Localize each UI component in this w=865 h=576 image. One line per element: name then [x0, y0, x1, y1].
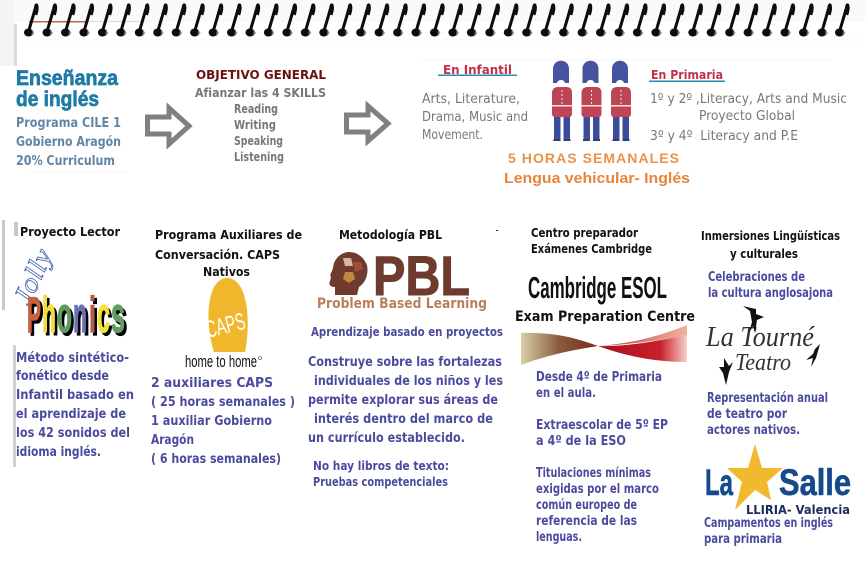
arrow: title to objective	[148, 108, 189, 144]
panel: Metodología PBL: No hay libros de texto:	[313, 459, 449, 473]
panel: Programa Auxiliares: 2 auxiliares CAPS	[151, 376, 273, 391]
panel: Metodología PBL: Problem Based Learning	[317, 296, 487, 312]
title block: Enseñanza de inglés: Gobierno Aragón	[16, 135, 121, 150]
panel: Centro preparador Cambridge: Desde 4º de Primaria	[536, 370, 662, 385]
panel: En Primaria: Proyecto Global	[699, 108, 795, 124]
panel: Proyecto Lector: el aprendizaje de	[16, 407, 126, 422]
logo: Cambridge ESOL: Exam Preparation Centre	[515, 309, 695, 325]
panel: Metodología PBL: individuales de los niños y les	[314, 374, 503, 389]
panel: Proyecto Lector: Proyecto Lector	[20, 224, 121, 239]
logo: Jolly Phonics: c	[97, 287, 110, 343]
panel: Metodología PBL: Metodología PBL	[339, 227, 442, 242]
objective block: Afianzar las 4 SKILLS	[195, 86, 326, 100]
panel: Programa Auxiliares: Aragón	[151, 433, 194, 448]
logo: La Salle: Salle	[779, 462, 851, 503]
panel: Proyecto Lector: los 42 sonidos del	[16, 426, 130, 441]
panel: Centro preparador Cambridge: en el aula.	[536, 386, 596, 401]
logo: Jolly Phonics: s	[111, 287, 125, 343]
logo: Jolly Phonics: n	[76, 290, 90, 346]
objective block: Speaking	[234, 134, 283, 148]
logo: Jolly Phonics: o	[60, 290, 74, 346]
panel: Inmersiones Lingüísticas: para primaria	[704, 532, 782, 547]
logo: CAPS home to home: CAPS	[203, 308, 248, 344]
panel: Inmersiones Lingüísticas	[701, 228, 851, 547]
panel: En Infantil: Drama, Music and	[422, 109, 528, 125]
panel: Proyecto Lector: Método sintético-	[16, 351, 129, 366]
callout: weekly hours: 5 HORAS SEMANALES	[508, 150, 679, 166]
panel: En Primaria: 1º y 2º ,Literacy, Arts and Music	[650, 91, 847, 107]
arrow: objective to stages	[346, 106, 388, 141]
panel: En Infantil: Movement.	[422, 127, 483, 143]
panel: En Primaria	[649, 67, 847, 144]
objective block: Reading	[234, 102, 278, 116]
logo: Jolly Phonics: i	[92, 290, 98, 346]
panel: Programa Auxiliares: Nativos	[203, 264, 250, 279]
panel: Inmersiones Lingüísticas: de teatro por	[707, 407, 787, 422]
logo: La Tourné Teatro: Teatro	[735, 350, 791, 376]
panel: Programa Auxiliares: 1 auxiliar Gobierno	[151, 414, 272, 429]
callout: weekly hours	[504, 150, 690, 187]
panel: Inmersiones Lingüísticas: Celebraciones de	[708, 270, 805, 285]
logo: Jolly Phonics: P	[30, 290, 44, 346]
logo: CAPS home to home: home to home	[185, 352, 257, 371]
logo: Jolly Phonics	[7, 244, 128, 346]
callout: weekly hours: Lengua vehicular- Inglés	[504, 170, 690, 187]
panel: Proyecto Lector	[7, 224, 134, 460]
panel: Metodología PBL: un currículo establecido.	[308, 431, 465, 446]
panel: En Primaria: 3º y 4º Literacy and P.E	[650, 128, 798, 144]
panel: Programa Auxiliares	[151, 227, 302, 467]
title block: Enseñanza de inglés: Enseñanza	[16, 67, 118, 90]
logo: Jolly Phonics: h	[44, 290, 58, 346]
logo: La Tourné Teatro: La Tourné	[705, 321, 815, 353]
title block: Enseñanza de inglés: 20% Curriculum	[16, 154, 115, 169]
panel: Metodología PBL	[308, 227, 503, 489]
logo: La Salle: LLIRIA- Valencia	[746, 502, 850, 517]
logo: Cambridge ESOL	[515, 270, 695, 365]
panel: En Infantil: En Infantil	[443, 62, 512, 77]
logo: La Salle	[705, 444, 851, 517]
objective block: Listening	[234, 150, 284, 164]
logo: Jolly Phonics: s	[114, 290, 128, 346]
panel: En Infantil	[422, 62, 528, 143]
logo: La Salle: La	[705, 462, 733, 503]
logo: La Tourné Teatro	[705, 306, 820, 385]
spiral binding rings	[24, 5, 848, 36]
panel: Centro preparador Cambridge: exigidas por el marco	[536, 482, 659, 497]
logo: Jolly Phonics: c	[100, 290, 112, 346]
panel: Programa Auxiliares: Conversación. CAPS	[155, 247, 280, 262]
panel: Metodología PBL: permite explorar sus áreas de	[308, 393, 498, 408]
panel: Centro preparador Cambridge: lenguas.	[536, 530, 582, 545]
logo: PBL head	[329, 244, 470, 307]
panel: Metodología PBL: interés dentro del marco de	[314, 412, 493, 427]
panel: Proyecto Lector: Infantil basado en	[16, 388, 134, 403]
logo: Jolly Phonics: n	[73, 287, 87, 343]
logo: Jolly Phonics: i	[89, 287, 96, 343]
panel: Inmersiones Lingüísticas: Representación anual	[707, 391, 828, 406]
panel: Centro preparador Cambridge: común europeo de	[536, 498, 637, 513]
panel: Centro preparador Cambridge: referencia de las	[536, 514, 637, 529]
logo: Jolly Phonics: o	[57, 287, 72, 343]
panel: Programa Auxiliares: ( 25 horas semanales )	[151, 395, 295, 410]
logo: Jolly Phonics: P	[27, 287, 41, 343]
panel: Centro preparador Cambridge: Titulaciones mínimas	[536, 466, 651, 481]
logo: PBL head: PBL	[373, 244, 470, 307]
panel: Centro preparador Cambridge	[515, 225, 695, 545]
panel: Centro preparador Cambridge: a 4º de la ESO	[536, 434, 626, 449]
panel: Metodología PBL: Pruebas competenciales	[313, 475, 448, 489]
title block: Enseñanza de inglés: de inglés	[16, 88, 99, 111]
panel: En Primaria: En Primaria	[651, 67, 723, 82]
logo: Jolly Phonics: Jolly	[7, 244, 59, 310]
logo: CAPS home to home	[185, 278, 262, 371]
panel: Inmersiones Lingüísticas: actores nativos.	[707, 423, 800, 438]
panel: Programa Auxiliares: ( 6 horas semanales)	[151, 452, 281, 467]
panel: Proyecto Lector: idioma inglés.	[16, 445, 101, 460]
title block: Enseñanza de inglés: Programa CILE 1	[16, 116, 121, 131]
panel: Inmersiones Lingüísticas: y culturales	[730, 246, 798, 261]
title block: Enseñanza de inglés	[16, 67, 121, 169]
objective block	[195, 68, 326, 164]
logo: Cambridge ESOL: Cambridge ESOL	[528, 270, 667, 305]
logo: Jolly Phonics: h	[42, 287, 56, 343]
panel: Centro preparador Cambridge: Exámenes Cambridge	[531, 241, 652, 256]
panel: Programa Auxiliares: Programa Auxiliares de	[155, 227, 302, 242]
panel: En Infantil: Arts, Literature,	[422, 91, 520, 107]
objective block: Writing	[234, 118, 276, 132]
panel: Centro preparador Cambridge: Centro preparador	[531, 225, 639, 240]
panel: Centro preparador Cambridge: Extraescolar de 5º EP	[536, 418, 668, 433]
panel: Metodología PBL: Construye sobre las fortalezas	[308, 355, 502, 370]
icon: three royal guards	[552, 61, 631, 141]
objective block: OBJETIVO GENERAL	[196, 68, 326, 82]
panel: Proyecto Lector: fonético desde	[16, 369, 109, 384]
panel: Metodología PBL: Aprendizaje basado en proyectos	[311, 325, 503, 339]
